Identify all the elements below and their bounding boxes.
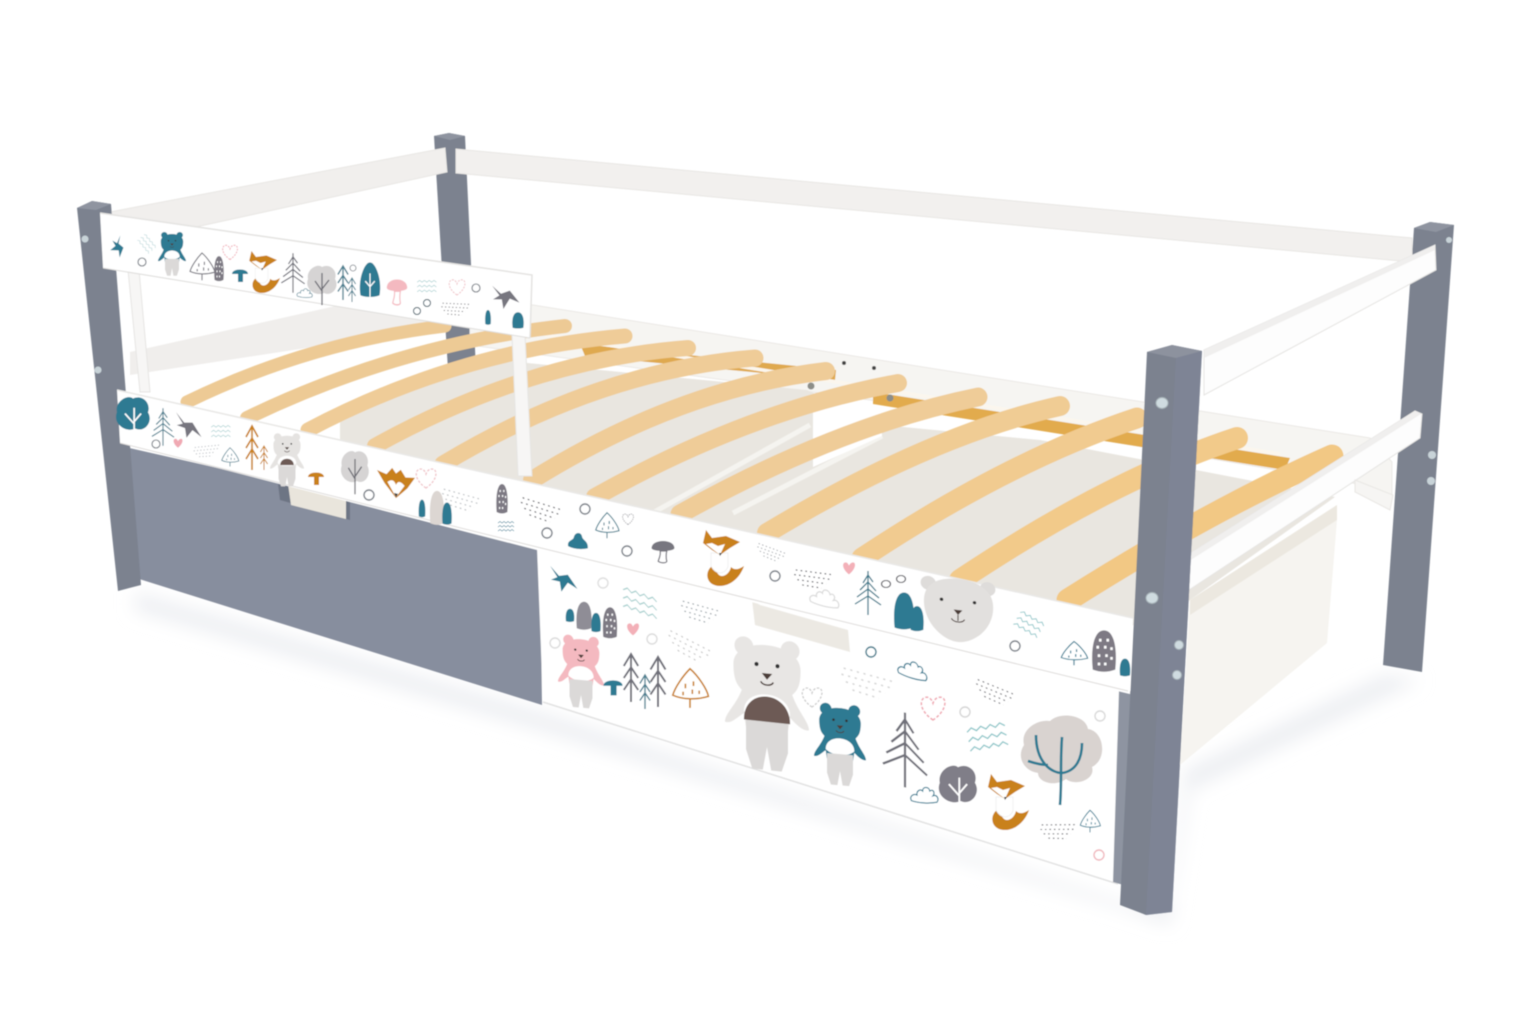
pink heart outline [416,469,436,488]
rings [542,504,1020,651]
ring [350,265,356,271]
guard board artwork [106,232,524,329]
pale heart [449,280,465,295]
back left post [434,133,476,370]
teal bear [158,232,186,276]
dotted blob [496,484,508,514]
gap under bed [813,403,882,467]
small cone [222,448,239,466]
drawer artwork [550,566,1105,860]
sitting fox [988,774,1029,830]
front left post [77,201,141,591]
pale ring [364,490,374,500]
right drawer side panel [1180,505,1337,765]
dashes [521,497,562,525]
waves [966,722,1008,751]
bear face [921,575,995,646]
grey bird [492,286,519,309]
ring [866,647,876,657]
dots [441,303,470,315]
ring [138,258,146,266]
lower right rail [1186,411,1422,592]
pale bear [270,433,304,486]
drawer interior [340,358,1335,640]
waves [623,587,657,619]
teal bush [116,397,150,431]
grey bird [176,412,202,443]
teal blobs [485,310,524,329]
cone tree [1061,642,1088,665]
pine [152,408,174,446]
rings [414,284,480,314]
teal bear [814,702,866,788]
left lower rail [130,305,450,375]
left guard supports [128,270,532,476]
amber support bar [545,335,1290,470]
dotted blob [214,256,224,281]
bird [106,236,130,260]
left top rail [110,148,447,240]
small rings [882,576,906,588]
waves [211,425,230,437]
ring [152,440,160,448]
pale dots [442,489,481,514]
pale ring [960,707,970,717]
pink heart [223,245,237,260]
small cloud [911,787,938,803]
grey drawer handle cut-out [278,484,350,520]
dots [194,444,220,459]
floor shadows [135,592,1420,925]
grey drawer [125,447,542,705]
blobs [419,491,452,525]
heart [174,439,183,448]
teal mushroom [603,680,623,695]
waves [498,522,514,531]
back right post [1383,222,1454,672]
arrow trees [624,654,666,709]
rings [550,634,657,648]
dark dots [976,679,1015,709]
leaf tree [360,262,380,302]
orange arrow trees [246,426,268,470]
pine [855,571,881,615]
fox face [377,464,415,503]
dark dots [1040,823,1077,840]
pink bear [558,634,604,710]
dots [681,601,720,626]
pine [281,253,305,293]
grey mushroom [652,541,674,563]
teal blobs [894,592,924,631]
sitting fox [703,530,744,586]
screws [1146,398,1184,680]
grey tree [307,266,337,305]
dots pale [669,630,712,668]
dotted blob [603,607,617,638]
waves [1013,610,1045,638]
bird [550,566,577,595]
teal blob [1120,659,1130,676]
white support under rail [1355,480,1393,510]
fox [249,251,280,293]
back bed frame board [470,296,1392,497]
pink heart [921,697,945,720]
lighter drawer edges [640,425,882,520]
dots [757,543,786,564]
dark heart [623,514,633,524]
orange mushroom [308,472,324,485]
waves [137,234,157,254]
pink heart [843,562,855,574]
arrow trees [338,266,356,302]
cone tree orange [673,669,708,708]
back top rail [456,149,1412,262]
upper right rail [1204,245,1436,395]
patterned drawer handle [752,600,850,652]
big tree [1021,715,1102,805]
pine [883,707,927,793]
pale heart [802,688,822,707]
screws [82,236,102,374]
front right post [1120,345,1202,915]
cloud [898,658,927,682]
wooden slats [187,326,1332,600]
dotted blob [1092,630,1116,672]
patterned drawer [537,548,1137,886]
pink mushroom [387,280,407,305]
guard rail board [100,213,532,338]
rings [1094,711,1105,860]
cone [190,253,215,280]
blobs [566,602,601,632]
dashes [794,570,833,589]
grey tree [341,451,369,494]
front board artwork [116,397,1130,676]
teal cloud [568,533,588,549]
cone tree [596,513,619,538]
big pale bear [725,634,809,775]
pale ring [598,578,608,588]
cloud [297,289,312,298]
heart [627,623,639,635]
small cone tree [1080,810,1100,832]
teal mushroom [232,270,248,282]
pale dots [841,668,894,702]
waves [417,280,436,292]
front side board [116,390,1133,694]
grey bush [939,766,977,804]
pale cloud [810,587,839,609]
